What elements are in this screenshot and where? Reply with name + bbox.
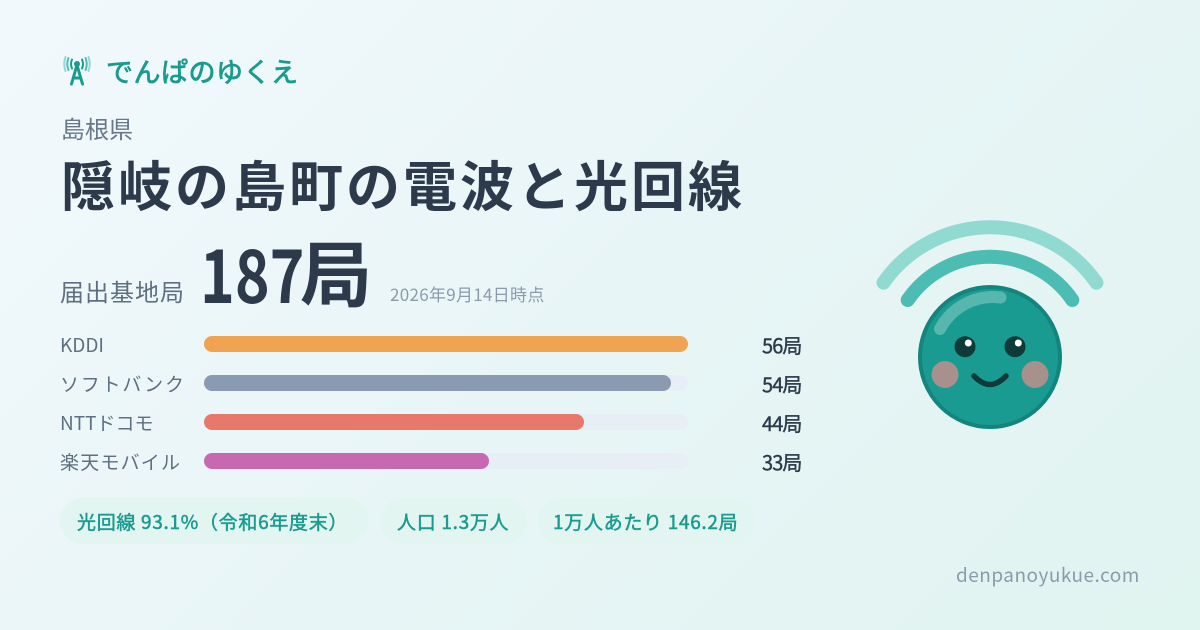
mascot: smiling radio wave character <box>876 220 1104 429</box>
row: SoftBank: ソフトバンク <box>60 370 186 397</box>
row: Rakuten Mobile <box>60 447 802 476</box>
brand name: でんぱのゆくえ <box>106 51 298 90</box>
row: Rakuten Mobile: 楽天モバイル <box>60 448 181 475</box>
row: SoftBank <box>60 369 802 398</box>
row: NTT docomo: 44局 <box>762 408 802 437</box>
pill: fiber coverage: 光回線 93.1%（令和6年度末） <box>77 508 348 535</box>
pill: population: 人口 1.3万人 <box>397 508 509 535</box>
right eye <box>1004 336 1026 357</box>
logo: brand <box>63 51 298 90</box>
row: KDDI: 56局 <box>762 330 802 359</box>
row: KDDI <box>60 330 802 359</box>
date: 2026年9月14日時点 <box>390 281 545 306</box>
row: NTT docomo: NTTドコモ <box>60 409 154 436</box>
row: SoftBank: 54局 <box>762 369 802 398</box>
pill: fiber coverage <box>60 498 369 544</box>
row: NTT docomo <box>60 408 802 437</box>
outer wave arc <box>884 227 1096 283</box>
smile <box>974 376 1006 384</box>
total count: 187 <box>200 219 305 324</box>
inner wave arc <box>908 257 1072 300</box>
row: Rakuten Mobile: 33局 <box>762 447 802 476</box>
title: 隠岐の島町の電波と光回線 <box>61 143 745 222</box>
left cheek <box>932 361 958 388</box>
label: registered base stations: 届出基地局 <box>60 273 185 308</box>
face <box>920 287 1060 427</box>
pill: population <box>380 498 527 544</box>
right cheek <box>1022 361 1048 388</box>
site url: denpanoyukue.com <box>956 561 1140 588</box>
prefecture: 島根県 <box>61 110 133 145</box>
total count <box>200 217 372 324</box>
icon: antenna <box>63 56 91 86</box>
row: KDDI: KDDI <box>60 331 104 358</box>
pill: per 10k people <box>538 498 755 544</box>
pill: per 10k people: 1万人あたり 146.2局 <box>553 508 738 535</box>
total count: 局 <box>300 217 372 322</box>
face highlight <box>940 297 1000 329</box>
left eye <box>954 336 976 357</box>
